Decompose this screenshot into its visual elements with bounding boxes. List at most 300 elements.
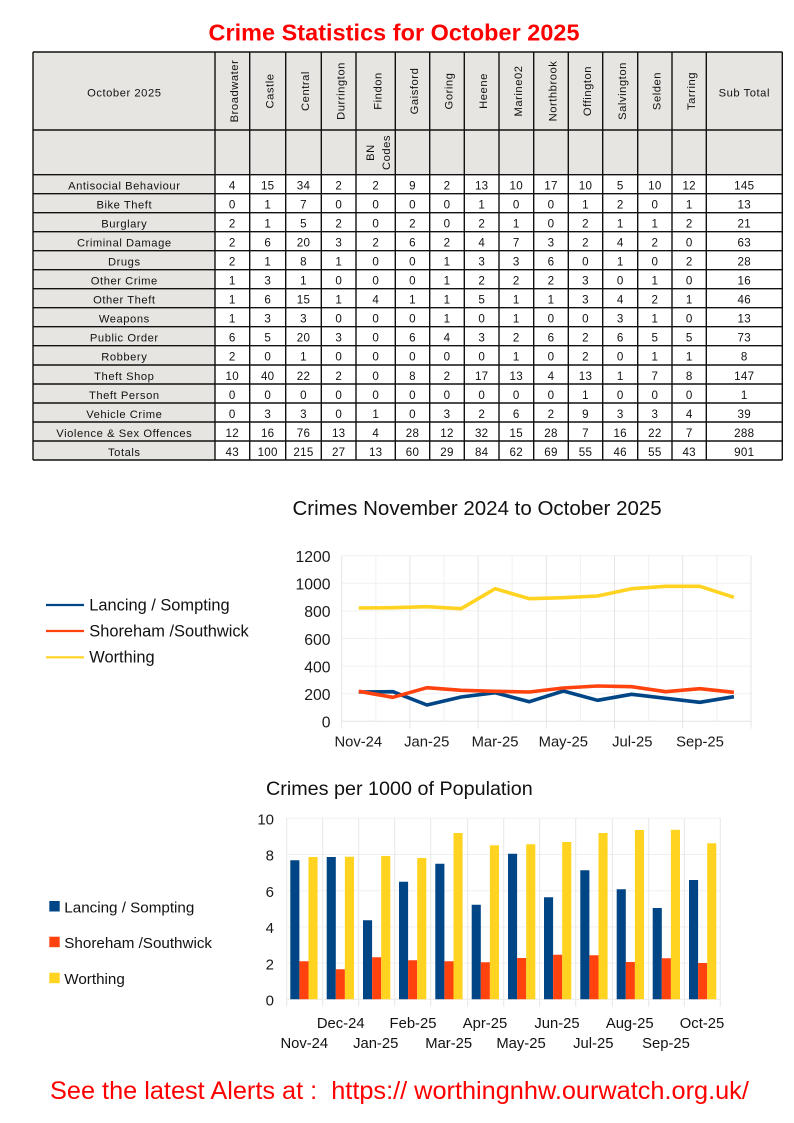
bars (290, 830, 716, 999)
table data values: 6 (229, 332, 236, 345)
table data values: 7 (686, 427, 693, 440)
table data values: 8 (741, 351, 748, 364)
table data values: 6 (513, 408, 520, 421)
bar chart x axis labels: May-25 (496, 1036, 546, 1052)
table data values: 46 (738, 294, 751, 307)
table data values: 32 (475, 427, 488, 440)
table data values: 3 (444, 408, 450, 421)
table data values: 2 (582, 218, 589, 231)
table data values: 5 (300, 218, 307, 231)
table data values: 0 (444, 218, 450, 231)
bar chart x axis labels: Jan-25 (353, 1036, 398, 1052)
table data values: 1 (264, 218, 271, 231)
bar chart y axis labels (257, 812, 274, 1010)
table data values: 6 (264, 294, 271, 307)
series: Worthing (359, 586, 734, 609)
table data values: 13 (579, 370, 592, 383)
table data values: 0 (652, 389, 658, 402)
table data values: 15 (510, 427, 523, 440)
table data values: 1 (617, 370, 624, 383)
table data values: 60 (406, 446, 419, 459)
table data values: 5 (686, 332, 693, 345)
series: Lancing / Sompting (359, 691, 734, 705)
table data values: 39 (738, 408, 751, 421)
row labels: Theft Shop (94, 371, 154, 383)
table data values: 2 (444, 370, 450, 383)
bar chart x axis labels: Nov-24 (280, 1036, 328, 1052)
table data values: 4 (617, 237, 624, 250)
bar chart y axis labels: 10 (257, 812, 274, 828)
table data values: 0 (548, 218, 554, 231)
table data values: 16 (613, 427, 627, 440)
table data values: 0 (444, 199, 450, 212)
table data values: 1 (652, 351, 658, 364)
table data values: 8 (300, 256, 307, 269)
table data values: 0 (335, 408, 342, 421)
table data values: 4 (617, 294, 624, 307)
bar chart x axis labels: Jul-25 (573, 1036, 613, 1052)
table data values: 15 (261, 180, 274, 193)
row labels: Violence & Sex Offences (56, 428, 192, 440)
table data values: 73 (738, 332, 751, 345)
table data values: 3 (513, 256, 520, 269)
table data values: 215 (293, 446, 314, 459)
table data values: 0 (335, 351, 342, 364)
line chart y axis labels: 800 (304, 604, 331, 621)
table data values: 7 (582, 427, 589, 440)
panel: crime statistics table (33, 52, 782, 460)
table data values: 6 (409, 332, 416, 345)
table data values: 2 (652, 237, 658, 250)
legend item: Worthing: Worthing (89, 649, 155, 667)
table header row: Marine02 (513, 65, 525, 117)
table header row: Gaisford (409, 68, 421, 114)
table data values: 2 (409, 218, 416, 231)
table data values: 17 (544, 180, 558, 193)
line chart x axis labels: Nov-24 (334, 735, 382, 751)
table data values: 1 (513, 313, 520, 326)
table data values: 15 (297, 294, 310, 307)
table data values: 4 (444, 332, 451, 345)
title: Crime Statistics for October 2025 (208, 20, 580, 46)
footer alert link text: See the latest Alerts at : https:// worthingnhw.ourwatch.org.uk/ (50, 1077, 750, 1105)
table data values: 1 (409, 294, 416, 307)
table data values: 2 (513, 275, 520, 288)
table data values: 28 (544, 427, 558, 440)
legend item: Lancing / Sompting: Lancing / Sompting (89, 597, 230, 615)
table data values: 0 (582, 313, 589, 326)
table data values: 9 (409, 180, 416, 193)
table data values: 13 (510, 370, 523, 383)
table data values: 3 (264, 408, 271, 421)
table data values: 1 (617, 256, 624, 269)
table data values: 6 (617, 332, 624, 345)
table data values: 1 (686, 199, 693, 212)
table data values: 0 (513, 389, 520, 402)
table data values: 55 (648, 446, 662, 459)
line chart y axis labels: 1000 (295, 577, 331, 594)
table data values: 16 (261, 427, 274, 440)
table header row: Goring (444, 73, 456, 109)
table data values: 1 (582, 199, 589, 212)
table data values: 6 (409, 237, 416, 250)
table data values: 288 (734, 427, 754, 440)
table data values: 2 (229, 218, 236, 231)
table data values: 0 (372, 370, 379, 383)
table header row: Broadwater (229, 60, 241, 122)
table data values: 34 (297, 180, 310, 193)
table data values: 1 (335, 294, 342, 307)
table data values: 2 (372, 237, 379, 250)
table data values: 13 (738, 313, 751, 326)
BN codes label: Codes (381, 135, 393, 170)
row labels: Vehicle Crime (86, 409, 162, 421)
row labels: Weapons (99, 314, 150, 326)
table data values: 0 (372, 351, 379, 364)
table data values: 12 (226, 427, 239, 440)
table data values: 21 (738, 218, 751, 231)
legend item: Worthing (46, 649, 155, 667)
bar chart title: Crimes per 1000 of Population (266, 778, 533, 800)
table data values: 0 (372, 332, 379, 345)
table data values: 0 (372, 389, 379, 402)
legend item: Worthing: Worthing (64, 971, 125, 988)
table header row: Sub Total (719, 88, 770, 100)
table data values: 0 (582, 256, 589, 269)
table data values: 3 (478, 256, 485, 269)
table data values: 6 (548, 332, 554, 345)
table data values: 0 (409, 351, 416, 364)
table data values: 2 (617, 199, 624, 212)
table data values: 0 (264, 351, 271, 364)
table data values: 1 (229, 294, 236, 307)
table data values: 1 (444, 275, 450, 288)
bar chart x axis labels: Aug-25 (606, 1016, 654, 1032)
table data values: 28 (406, 427, 419, 440)
table data values: 8 (409, 370, 416, 383)
table data values: 22 (297, 370, 310, 383)
table data values: 2 (478, 408, 485, 421)
table data values: 0 (372, 313, 379, 326)
table data values: 3 (264, 313, 271, 326)
table data values: 2 (229, 351, 236, 364)
table data values: 43 (682, 446, 696, 459)
table data values: 5 (652, 332, 658, 345)
panel: line chart (292, 497, 751, 751)
bar chart x axis labels: Oct-25 (680, 1016, 724, 1032)
table data values: 2 (652, 294, 658, 307)
table data values: 2 (229, 237, 236, 250)
table data values: 0 (686, 389, 693, 402)
row labels: Other Theft (93, 295, 156, 307)
table data values: 6 (264, 237, 271, 250)
line chart x axis labels: Jan-25 (404, 735, 449, 751)
line chart x axis labels: May-25 (539, 735, 588, 751)
table data values: 3 (617, 408, 624, 421)
table data values: 1 (264, 256, 271, 269)
table header row: October 2025 (87, 88, 162, 100)
table data values: 3 (264, 275, 271, 288)
table data values: 7 (513, 237, 520, 250)
table data values: 0 (478, 313, 485, 326)
bar chart x axis labels: Jun-25 (534, 1016, 580, 1032)
table data values: 1 (513, 218, 520, 231)
table data values: 16 (738, 275, 751, 288)
bar chart gridlines (287, 818, 720, 1007)
line chart gridlines (342, 556, 751, 729)
table data values: 2 (548, 275, 554, 288)
table data values: 0 (372, 275, 379, 288)
table data values: 13 (369, 446, 382, 459)
table data values: 5 (264, 332, 271, 345)
table data values: 3 (617, 313, 624, 326)
table data values: 2 (686, 218, 693, 231)
table data values: 10 (579, 180, 592, 193)
table data values: 4 (548, 370, 555, 383)
line chart y axis labels: 200 (304, 687, 331, 704)
row labels: Other Crime (91, 276, 158, 288)
legend: line chart (46, 597, 250, 667)
table shaded cell backgrounds (33, 52, 782, 460)
table data values: 0 (652, 256, 658, 269)
table data values: 3 (582, 275, 589, 288)
table data values: 3 (335, 237, 342, 250)
table data values: 0 (548, 389, 554, 402)
bar chart y axis labels: 4 (266, 920, 274, 937)
table data values: 3 (300, 313, 307, 326)
table data values: 1 (652, 275, 658, 288)
table data values: 1 (741, 389, 748, 402)
legend item: Shoreham / Southwick: Shoreham /Southwick (64, 935, 212, 952)
table data values: 3 (582, 294, 589, 307)
legend item: Shoreham / Southwick: Shoreham /Southwick (89, 623, 250, 641)
series: Shoreham / Southwick (359, 686, 734, 697)
table data values: 76 (297, 427, 310, 440)
table data values: 0 (229, 389, 236, 402)
line chart x axis labels: Mar-25 (472, 735, 518, 751)
line chart x axis labels (334, 735, 724, 751)
row labels: Theft Person (89, 390, 160, 402)
table data values: 0 (444, 389, 450, 402)
table data values: 0 (409, 313, 416, 326)
table data values: 1 (548, 294, 554, 307)
table data values: 55 (579, 446, 592, 459)
table data values: 1 (617, 218, 624, 231)
table data values: 84 (475, 446, 489, 459)
table data values: 0 (686, 313, 693, 326)
table data values: 100 (258, 446, 278, 459)
table data values: 20 (297, 237, 310, 250)
line chart y axis labels: 400 (304, 659, 331, 676)
bar chart x axis labels (280, 1016, 724, 1052)
bar chart y axis labels: 0 (266, 992, 274, 1010)
table header row: Findon (372, 72, 384, 110)
table data values: 0 (300, 389, 307, 402)
bar chart x axis labels: Feb-25 (390, 1016, 436, 1032)
line series (359, 586, 734, 705)
table data values: 7 (300, 199, 307, 212)
table data values: 5 (617, 180, 624, 193)
row labels (56, 181, 192, 459)
table data values: 4 (686, 408, 693, 421)
table data values: 0 (548, 313, 554, 326)
table data values: 13 (475, 180, 488, 193)
row labels: Antisocial Behaviour (68, 181, 180, 193)
table data values: 20 (297, 332, 310, 345)
table data values: 5 (478, 294, 485, 307)
table data values: 10 (510, 180, 523, 193)
table data values: 1 (686, 294, 693, 307)
table header row: Offington (582, 66, 594, 116)
table data values: 2 (582, 237, 589, 250)
table header row: Castle (264, 73, 276, 109)
table data values: 2 (444, 237, 450, 250)
table data values: 2 (335, 218, 342, 231)
table header row: Salvington (617, 62, 629, 120)
line chart x axis labels: Jul-25 (612, 735, 652, 751)
BN codes label (365, 135, 393, 170)
row labels: Criminal Damage (77, 238, 172, 250)
table header row: Selden (652, 72, 664, 110)
table data values: 0 (617, 351, 624, 364)
table data values: 2 (686, 256, 693, 269)
table data values: 0 (335, 389, 342, 402)
table data values: 43 (226, 446, 239, 459)
bar chart y axis labels: 8 (266, 848, 274, 865)
table data values: 1 (335, 256, 342, 269)
table data values: 2 (548, 408, 554, 421)
table data values: 0 (409, 275, 416, 288)
table data values: 27 (332, 446, 345, 459)
table data values: 0 (409, 199, 416, 212)
table data values: 0 (478, 389, 485, 402)
table data values: 2 (335, 370, 342, 383)
table data values: 0 (335, 275, 342, 288)
row labels: Robbery (101, 352, 147, 364)
table data values: 1 (444, 294, 450, 307)
table data values: 0 (652, 199, 658, 212)
table data values: 69 (544, 446, 558, 459)
table data values: 1 (513, 351, 520, 364)
table data values: 1 (300, 351, 307, 364)
table data values (226, 180, 754, 459)
table data values: 0 (686, 275, 693, 288)
bars: Shoreham / Southwick (299, 955, 707, 999)
table data values: 1 (686, 351, 693, 364)
table data values: 0 (513, 199, 520, 212)
table data values: 2 (478, 275, 485, 288)
table data values: 6 (548, 256, 554, 269)
table data values: 3 (478, 332, 485, 345)
line chart y axis labels (295, 549, 331, 732)
table data values: 2 (372, 180, 379, 193)
table data values: 1 (229, 313, 236, 326)
table data values: 0 (548, 199, 554, 212)
bar chart x axis labels: Apr-25 (463, 1016, 507, 1032)
table data values: 1 (652, 218, 658, 231)
table data values: 7 (652, 370, 658, 383)
table data values: 1 (478, 199, 485, 212)
line chart y axis labels: 600 (304, 632, 331, 649)
table data values: 0 (409, 389, 416, 402)
table data values: 2 (582, 351, 589, 364)
line chart y axis labels: 1200 (295, 549, 331, 566)
table data values: 0 (335, 313, 342, 326)
table grid lines (33, 52, 782, 460)
bars: Lancing / Sompting (290, 854, 698, 999)
table data values: 145 (734, 180, 754, 193)
table data values: 10 (226, 370, 239, 383)
table data values: 63 (738, 237, 751, 250)
table data values: 0 (548, 351, 554, 364)
table data values: 4 (478, 237, 485, 250)
bar chart y axis labels: 2 (266, 956, 274, 973)
legend item: Lancing / Sompting: Lancing / Sompting (64, 899, 194, 916)
table header row: Central (300, 71, 312, 111)
row labels: Public Order (90, 333, 159, 345)
table data values: 40 (261, 370, 274, 383)
table data values: 2 (478, 218, 485, 231)
table data values: 901 (734, 446, 754, 459)
table header row: Tarring (686, 72, 698, 110)
table header row: Northbrook (548, 61, 560, 121)
table data values: 2 (229, 256, 236, 269)
table data values: 4 (372, 294, 379, 307)
table data values: 0 (444, 351, 450, 364)
row labels: Burglary (101, 219, 147, 231)
line chart title: Crimes November 2024 to October 2025 (292, 497, 662, 520)
legend: bar chart (49, 899, 212, 988)
table data values: 3 (335, 332, 342, 345)
table data values: 0 (372, 218, 379, 231)
table data values: 3 (300, 408, 307, 421)
table data values: 12 (682, 180, 696, 193)
table data values: 0 (409, 408, 416, 421)
table data values: 1 (444, 256, 450, 269)
row labels: Totals (108, 447, 141, 459)
table data values: 0 (617, 275, 624, 288)
table header row: Durrington (335, 62, 347, 120)
table data values: 147 (734, 370, 754, 383)
line chart y axis labels: 0 (322, 715, 331, 732)
table data values: 3 (652, 408, 658, 421)
table data values: 29 (440, 446, 454, 459)
bar chart x axis labels: Dec-24 (317, 1016, 365, 1032)
table data values: 0 (686, 237, 693, 250)
row labels: Bike Theft (96, 200, 152, 212)
table data values: 2 (444, 180, 450, 193)
table data values: 2 (335, 180, 342, 193)
table data values: 4 (372, 427, 379, 440)
table header row (87, 60, 770, 122)
table data values: 13 (738, 199, 751, 212)
table data values: 3 (548, 237, 554, 250)
bar chart y axis labels: 6 (266, 884, 274, 901)
table data values: 1 (582, 389, 589, 402)
table data values: 0 (372, 256, 379, 269)
table data values: 62 (510, 446, 523, 459)
table data values: 0 (229, 199, 236, 212)
table data values: 1 (372, 408, 379, 421)
table data values: 1 (229, 275, 236, 288)
table data values: 0 (264, 389, 271, 402)
table data values: 0 (372, 199, 379, 212)
bar chart x axis labels: Mar-25 (425, 1036, 472, 1052)
table data values: 0 (617, 389, 624, 402)
table header row: Heene (478, 73, 490, 109)
table data values: 10 (648, 180, 662, 193)
table data values: 2 (582, 332, 589, 345)
